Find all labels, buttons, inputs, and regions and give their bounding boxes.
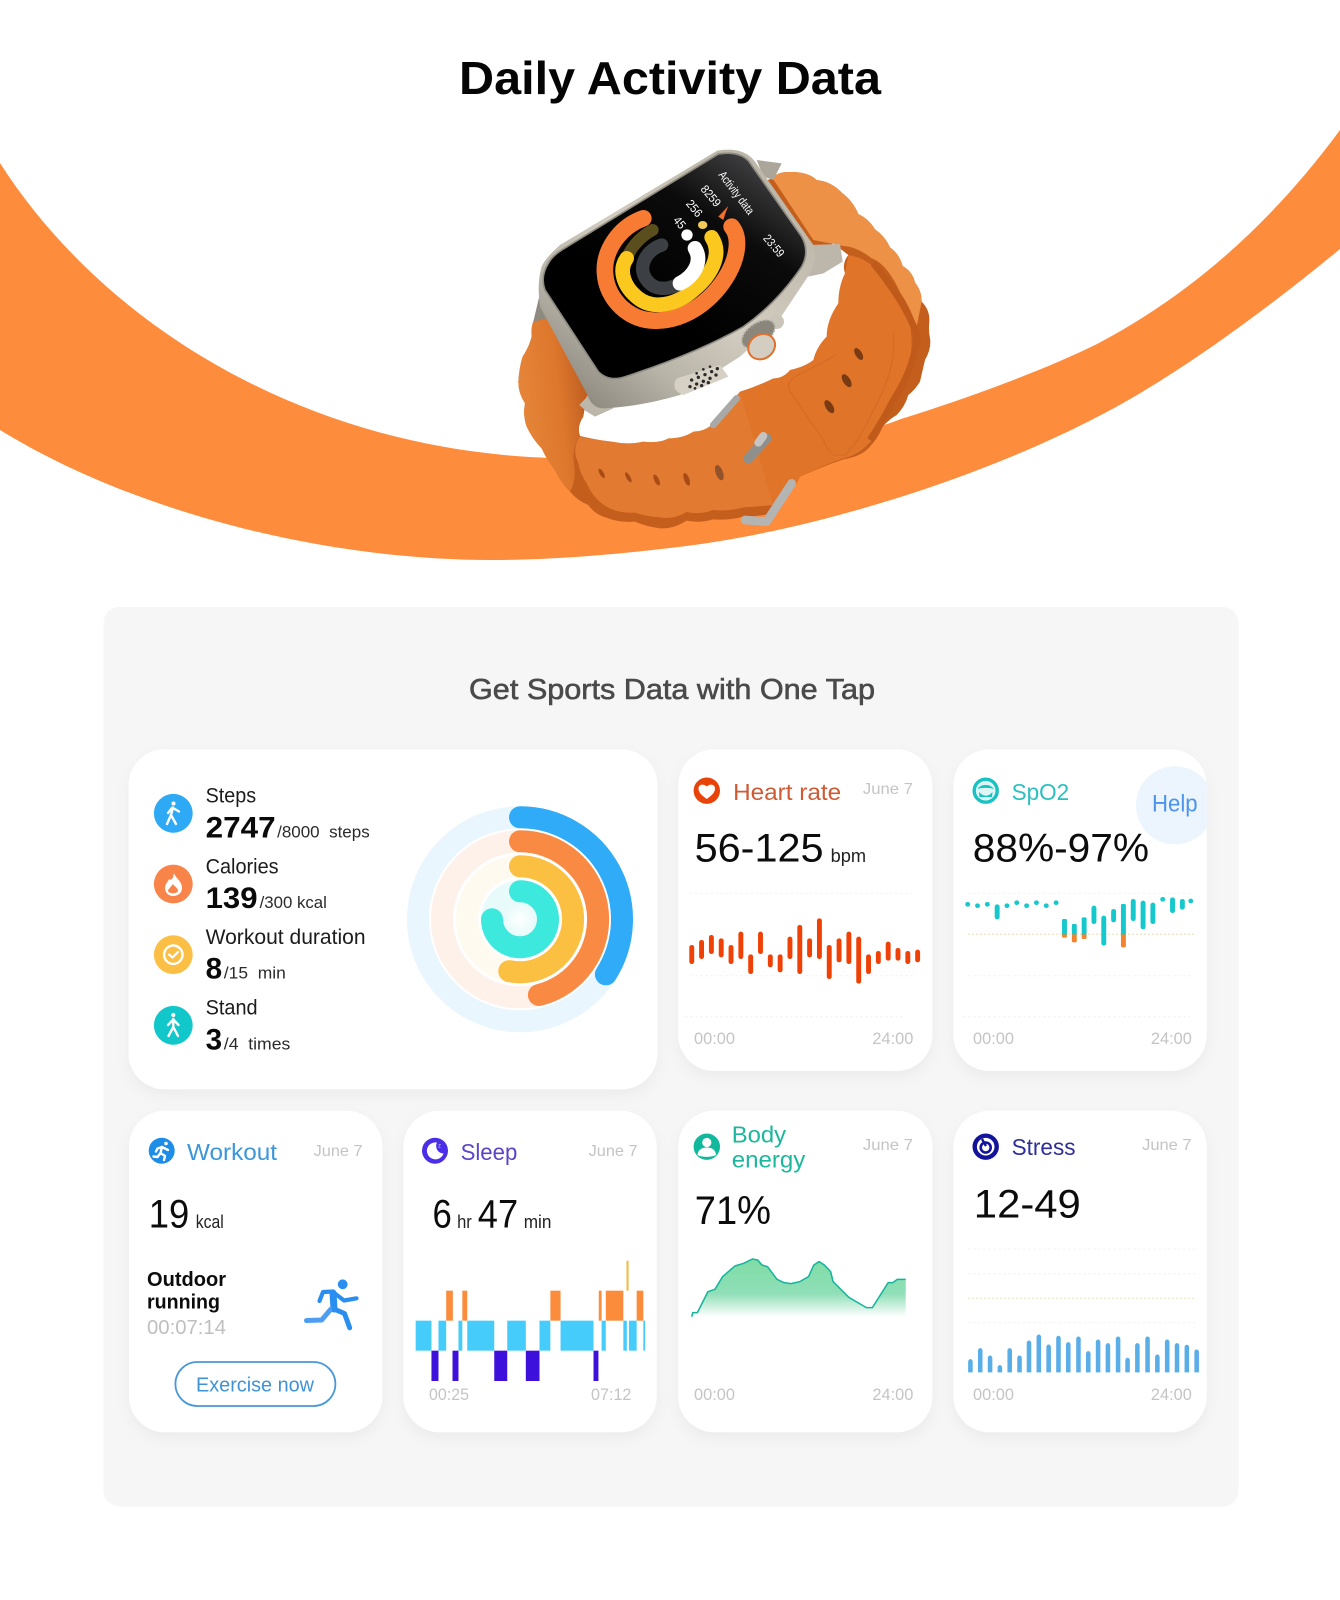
card: heart rate: bpm: [831, 846, 866, 866]
card: body energy: June 7: [863, 1137, 913, 1154]
steps row: [154, 785, 370, 844]
card: sleep: hr: [457, 1212, 472, 1232]
card: body energy: 00:00: [694, 1385, 735, 1404]
card: workout: 19: [149, 1192, 189, 1236]
card: SpO2: 88%-97%: [973, 827, 1149, 871]
card: stress: 00:00: [973, 1385, 1014, 1404]
calories row: Calories: [206, 855, 279, 878]
card: stress: 12-49: [974, 1183, 1081, 1227]
icon: SpO2: [974, 779, 997, 802]
orange swoosh band: [0, 130, 1340, 560]
card: sleep: 6: [433, 1192, 452, 1236]
card: body energy: 71%: [695, 1189, 771, 1233]
watch screen icons: [681, 206, 728, 241]
concentric activity rings chart: [418, 817, 622, 1021]
button: exercise now: Exercise now: [196, 1375, 315, 1397]
card: heart rate: 56-125: [695, 827, 824, 871]
card: workout: [129, 1111, 382, 1432]
watch speaker grille: [674, 365, 728, 395]
icon: body energy: [694, 1134, 720, 1160]
card: heart rate: 24:00: [872, 1029, 913, 1048]
card: sleep: Sleep: [461, 1139, 517, 1165]
card: sleep: [403, 1111, 657, 1432]
watch screen text: [670, 168, 788, 260]
card: workout: running: [147, 1291, 220, 1314]
stand row: Stand: [206, 997, 258, 1020]
card: heart rate: 00:00: [694, 1029, 735, 1048]
watch screen text: 45: [670, 214, 689, 232]
heart rate bar chart: [689, 918, 920, 984]
card: stress: 24:00: [1151, 1385, 1192, 1404]
strap adjustment holes: [597, 347, 865, 487]
calories row: 139: [206, 882, 258, 915]
button: exercise now: [175, 1362, 335, 1406]
card: sleep: 00:25: [429, 1385, 469, 1404]
icon: workout runner badge: [149, 1138, 175, 1164]
help bubble: [1136, 766, 1214, 844]
watch screen text: 8259: [698, 182, 724, 210]
calories row: [154, 855, 327, 915]
title: Daily Activity Data: [459, 52, 881, 104]
workout duration row: [154, 926, 366, 986]
icon: stress: [972, 1134, 999, 1160]
workout duration row: Workout duration: [206, 926, 366, 949]
card: sleep: min: [524, 1212, 551, 1232]
watch screen text: 256: [683, 197, 706, 220]
watch screen text: 23:59: [760, 232, 788, 260]
workout duration row: /15 min: [224, 964, 286, 983]
card: workout: Outdoor: [147, 1268, 226, 1291]
heading: body energy: Body: [732, 1122, 787, 1148]
SpO2 range chart: [965, 897, 1193, 947]
card: sleep: 47: [478, 1192, 518, 1236]
smartwatch product image: [518, 150, 930, 528]
help bubble: Help: [1152, 791, 1198, 818]
steps row: /8000 steps: [277, 822, 370, 841]
heading: body energy: [732, 1122, 806, 1172]
buckle: [713, 398, 792, 522]
watch screen: [543, 153, 806, 379]
steps row: 2747: [206, 811, 276, 844]
card: SpO2: SpO2: [1012, 779, 1069, 805]
steps row: Steps: [206, 785, 256, 808]
card: heart rate: Heart rate: [733, 779, 841, 805]
card: body energy: [678, 1111, 932, 1432]
stand row: /4 times: [224, 1034, 290, 1053]
heading: body energy: energy: [732, 1146, 806, 1172]
watch activity rings: [605, 218, 737, 321]
panel heading: Get Sports Data with One Tap: [469, 674, 875, 706]
card: daily goals summary: [128, 749, 658, 1089]
watch case: [539, 150, 815, 408]
watch screen text: Activity data: [716, 168, 757, 217]
card: SpO2: [953, 749, 1214, 1071]
stress bar chart: [968, 1334, 1199, 1372]
card: heart rate: [678, 749, 932, 1071]
card: SpO2: 00:00: [973, 1029, 1014, 1048]
workout duration row: 8: [206, 953, 222, 986]
icon: heart: [694, 778, 720, 804]
card: stress: June 7: [1142, 1137, 1192, 1154]
watch crown: [737, 314, 784, 365]
card: stress: [953, 1111, 1207, 1432]
card: workout: kcal: [196, 1212, 224, 1232]
icon: moon: [422, 1138, 448, 1164]
card: workout: June 7: [314, 1143, 363, 1160]
stand row: [154, 997, 290, 1056]
card: workout: 00:07:14: [147, 1317, 226, 1339]
stand row: 3: [206, 1023, 222, 1056]
icon: moon: z: [438, 1144, 441, 1150]
watch lugs: [533, 160, 843, 417]
hole behind watch: [579, 243, 848, 443]
card: workout: Workout: [187, 1139, 278, 1165]
icon: running figure: [306, 1279, 356, 1328]
card: body energy: 24:00: [872, 1385, 913, 1404]
card: stress: Stress: [1012, 1134, 1075, 1160]
card: SpO2: 24:00: [1151, 1029, 1192, 1048]
card: sleep: 07:12: [591, 1385, 631, 1404]
calories row: /300 kcal: [260, 893, 327, 912]
watch strap: [518, 172, 930, 528]
card: heart rate: June 7: [863, 781, 913, 798]
body energy area chart: [692, 1259, 906, 1317]
sleep stages chart: [416, 1261, 645, 1381]
card: sleep: June 7: [589, 1143, 638, 1160]
